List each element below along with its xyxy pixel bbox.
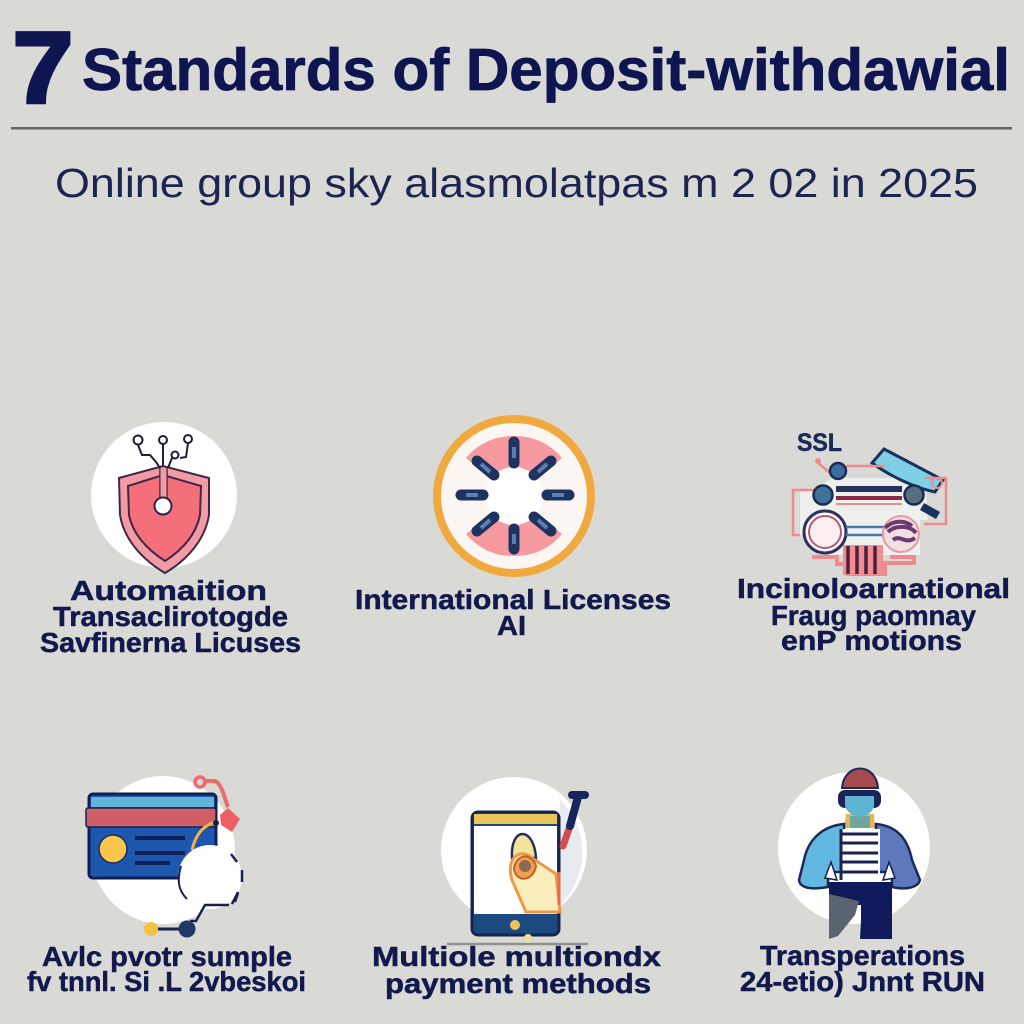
- item: international licenses wheel: [355, 415, 671, 641]
- label: fraud prevention: Fraug paomnay: [771, 600, 977, 631]
- label: multiple payment methods: payment methods: [385, 968, 651, 999]
- icon: support person: [778, 768, 930, 939]
- label: international licenses: AI: [497, 610, 526, 641]
- label: multiple payment methods: Multiole multiondx: [372, 941, 662, 972]
- title: Standards of Deposit-withdawial: [82, 37, 1010, 103]
- label: sample: fv tnnl. Si .L 2vbeskoi: [27, 966, 306, 997]
- icon: phone with hand: [441, 777, 588, 944]
- label: fraud prevention: [737, 573, 1010, 656]
- label: transparent operations: [740, 940, 985, 997]
- icon: credit card with cloud: [86, 776, 242, 938]
- item: automation shield: [40, 422, 301, 658]
- icon: wheel: [433, 415, 595, 577]
- label: multiple payment methods: [372, 941, 662, 999]
- item: payment card: [27, 776, 306, 997]
- label: fraud prevention: enP motions: [781, 625, 962, 656]
- icon: shield with circuit: [91, 422, 237, 573]
- label: international licenses: International Licenses: [355, 584, 671, 615]
- item: SSL encryption: [737, 429, 1010, 656]
- title: 7: [13, 12, 73, 124]
- subtitle: Online group sky alasmolatpas m 2 02 in 2025: [55, 160, 978, 206]
- icon: SSL machine: SSL: [797, 429, 842, 457]
- label: sample: [27, 941, 306, 997]
- label: transparent operations: Transperations: [760, 940, 965, 971]
- icon: SSL machine: [793, 429, 946, 575]
- label: fraud prevention: Incinoloarnational: [737, 573, 1010, 604]
- label: automation: Transaclirotogde: [53, 601, 288, 632]
- label: automation: Automaition: [70, 575, 267, 606]
- item: transparent operations: [740, 768, 985, 997]
- label: automation: Savfinerna Licuses: [40, 627, 301, 658]
- item: multiple payment methods: [372, 777, 662, 999]
- label: automation: [40, 575, 301, 658]
- label: sample: Avlc pvotr sumple: [42, 941, 292, 972]
- label: international licenses: [355, 584, 671, 641]
- label: transparent operations: 24-etio) Jnnt RUN: [740, 966, 985, 997]
- title: [13, 12, 1010, 124]
